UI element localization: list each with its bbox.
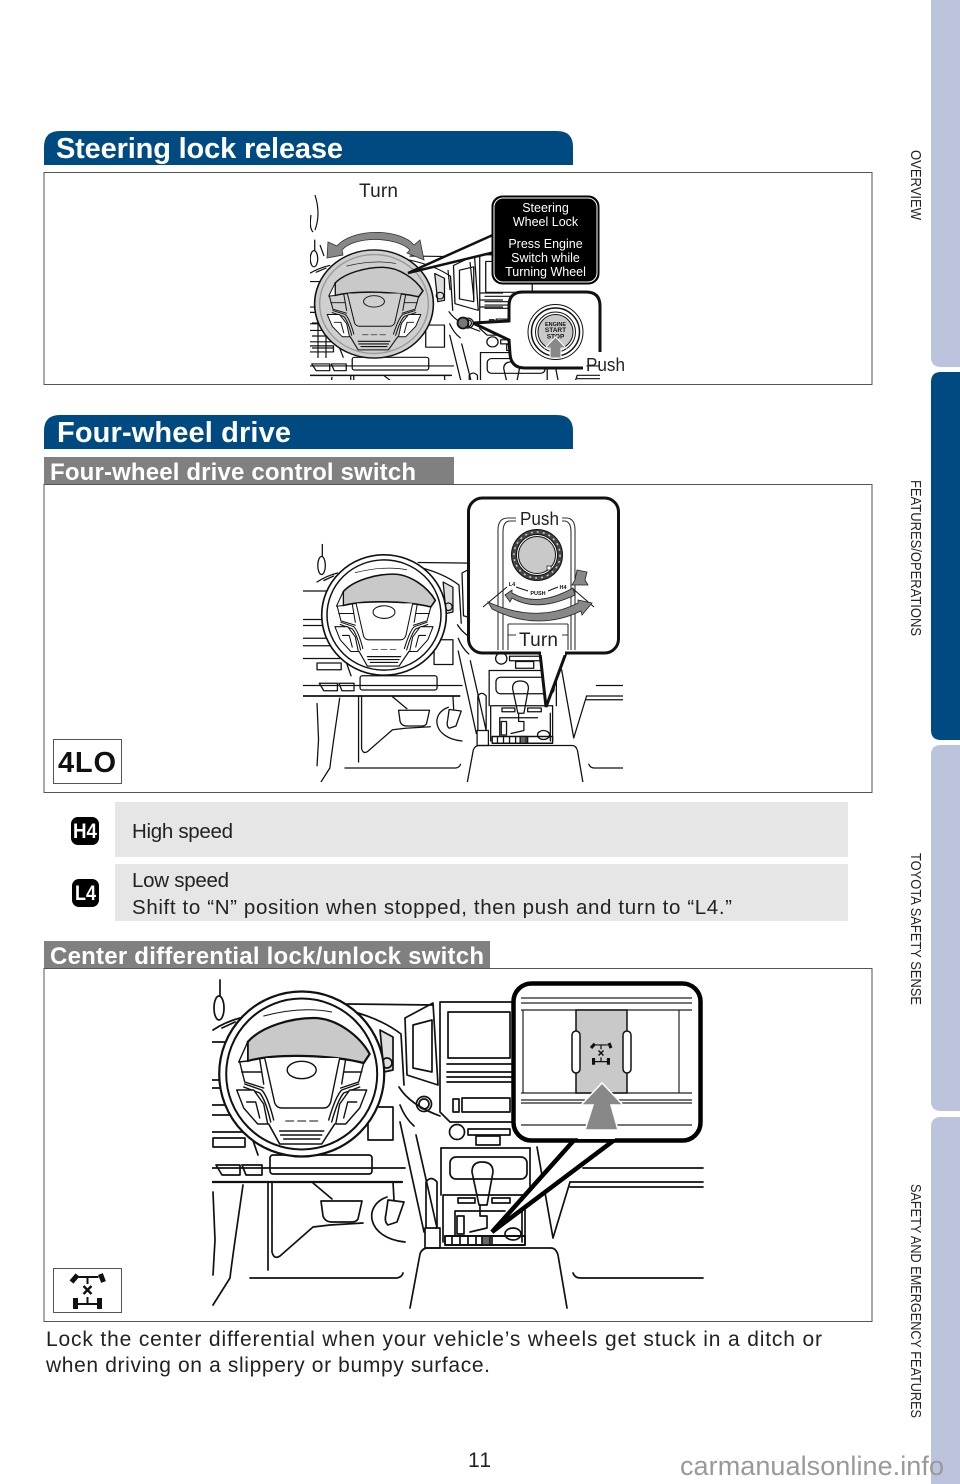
row: low speed: Shift to “N” position when stopped, then push and turn to “L4.” (132, 896, 732, 919)
sidebar label: overview: OVERVIEW (907, 150, 924, 221)
watermark: carmanualsonline.info (680, 1451, 944, 1481)
callout: four-wheel drive dial (468, 498, 618, 707)
sidebar label: safety and emergency features: SAFETY AND EMERGENCY FEATURES (907, 1184, 924, 1418)
callout: steering wheel lock message: Turning Wheel (505, 265, 586, 279)
callout: four-wheel drive dial: Turn (519, 630, 558, 651)
panel: steering lock release (44, 172, 872, 385)
icon: 4LO indicator (54, 740, 122, 784)
body text: center differential note: when driving on a slippery or bumpy surface. (45, 1354, 490, 1377)
icon: start button location on dash (458, 318, 468, 328)
icon: L4: L4 (75, 882, 96, 905)
heading: steering lock release: Steering lock release (56, 133, 343, 165)
sidebar tab: overview (931, 0, 960, 367)
icon: H4: H4 (73, 820, 97, 843)
icon: dial knob (512, 530, 562, 580)
panel: four-wheel drive control switch (44, 484, 872, 792)
page number: 11 (468, 1449, 491, 1472)
sidebar label: toyota safety sense: TOYOTA SAFETY SENSE (907, 853, 924, 1005)
row: high speed: High speed (132, 820, 233, 843)
illustration: dashboard with steering wheel (310, 194, 600, 380)
icon: turn arrows (505, 588, 575, 605)
illustration: dashboard and console (303, 544, 623, 782)
body text: center differential note: Lock the center differential when your vehicle’s wheels get stuck in a ditch or (46, 1328, 822, 1351)
heading: four-wheel drive: Four-wheel drive (57, 417, 291, 449)
panel: center differential lock/unlock switch (44, 968, 872, 1322)
icon: gray up arrow (581, 1083, 623, 1130)
icon: differential lock indicator (54, 1268, 122, 1312)
sidebar tab: safety and emergency features (931, 1117, 960, 1484)
subheading: center differential lock/unlock switch: Center differential lock/unlock switch (50, 943, 484, 970)
callout: steering wheel lock message: Switch while (511, 251, 580, 265)
callout: steering wheel lock message: Press Engine (508, 237, 583, 251)
callout: engine start stop button: ENGINE (545, 322, 566, 328)
callout: four-wheel drive dial: L4 (509, 582, 516, 588)
body text: center differential note (45, 1328, 822, 1377)
callout: steering wheel lock message: Steering (522, 201, 569, 215)
label: turn (516, 630, 562, 650)
heading: four-wheel drive (44, 415, 573, 449)
callout: engine start stop button: STOP (547, 334, 565, 340)
label: push: Push (586, 355, 625, 375)
callout: steering wheel lock message: Wheel Lock (513, 215, 579, 229)
sidebar label: features/operations: FEATURES/OPERATIONS (907, 480, 924, 636)
sidebar tab: features/operations (active) (931, 372, 960, 740)
callout: four-wheel drive dial: PUSH (530, 591, 546, 597)
subheading: four-wheel drive control switch: Four-wheel drive control switch (50, 459, 416, 486)
callout: four-wheel drive dial: Push (520, 509, 559, 529)
sidebar tab: toyota safety sense (931, 745, 960, 1111)
callout: center differential switch (492, 984, 700, 1232)
callout: engine start stop button: START (545, 327, 566, 334)
icon: 4LO indicator: 4LO (58, 747, 116, 779)
icon: differential symbol small (591, 1043, 611, 1065)
label: push (517, 510, 562, 528)
row: low speed (115, 864, 848, 921)
callout: engine start stop button (473, 292, 600, 368)
icon: gray turn arrows (327, 232, 424, 260)
row: high speed (115, 802, 848, 857)
callout: four-wheel drive dial: H4 (559, 585, 567, 591)
row: low speed: Low speed (132, 869, 229, 892)
label: turn: Turn (359, 181, 398, 202)
callout: steering wheel lock message (408, 196, 600, 284)
illustration: dashboard and console (190, 980, 703, 1308)
heading: steering lock release (44, 131, 573, 165)
